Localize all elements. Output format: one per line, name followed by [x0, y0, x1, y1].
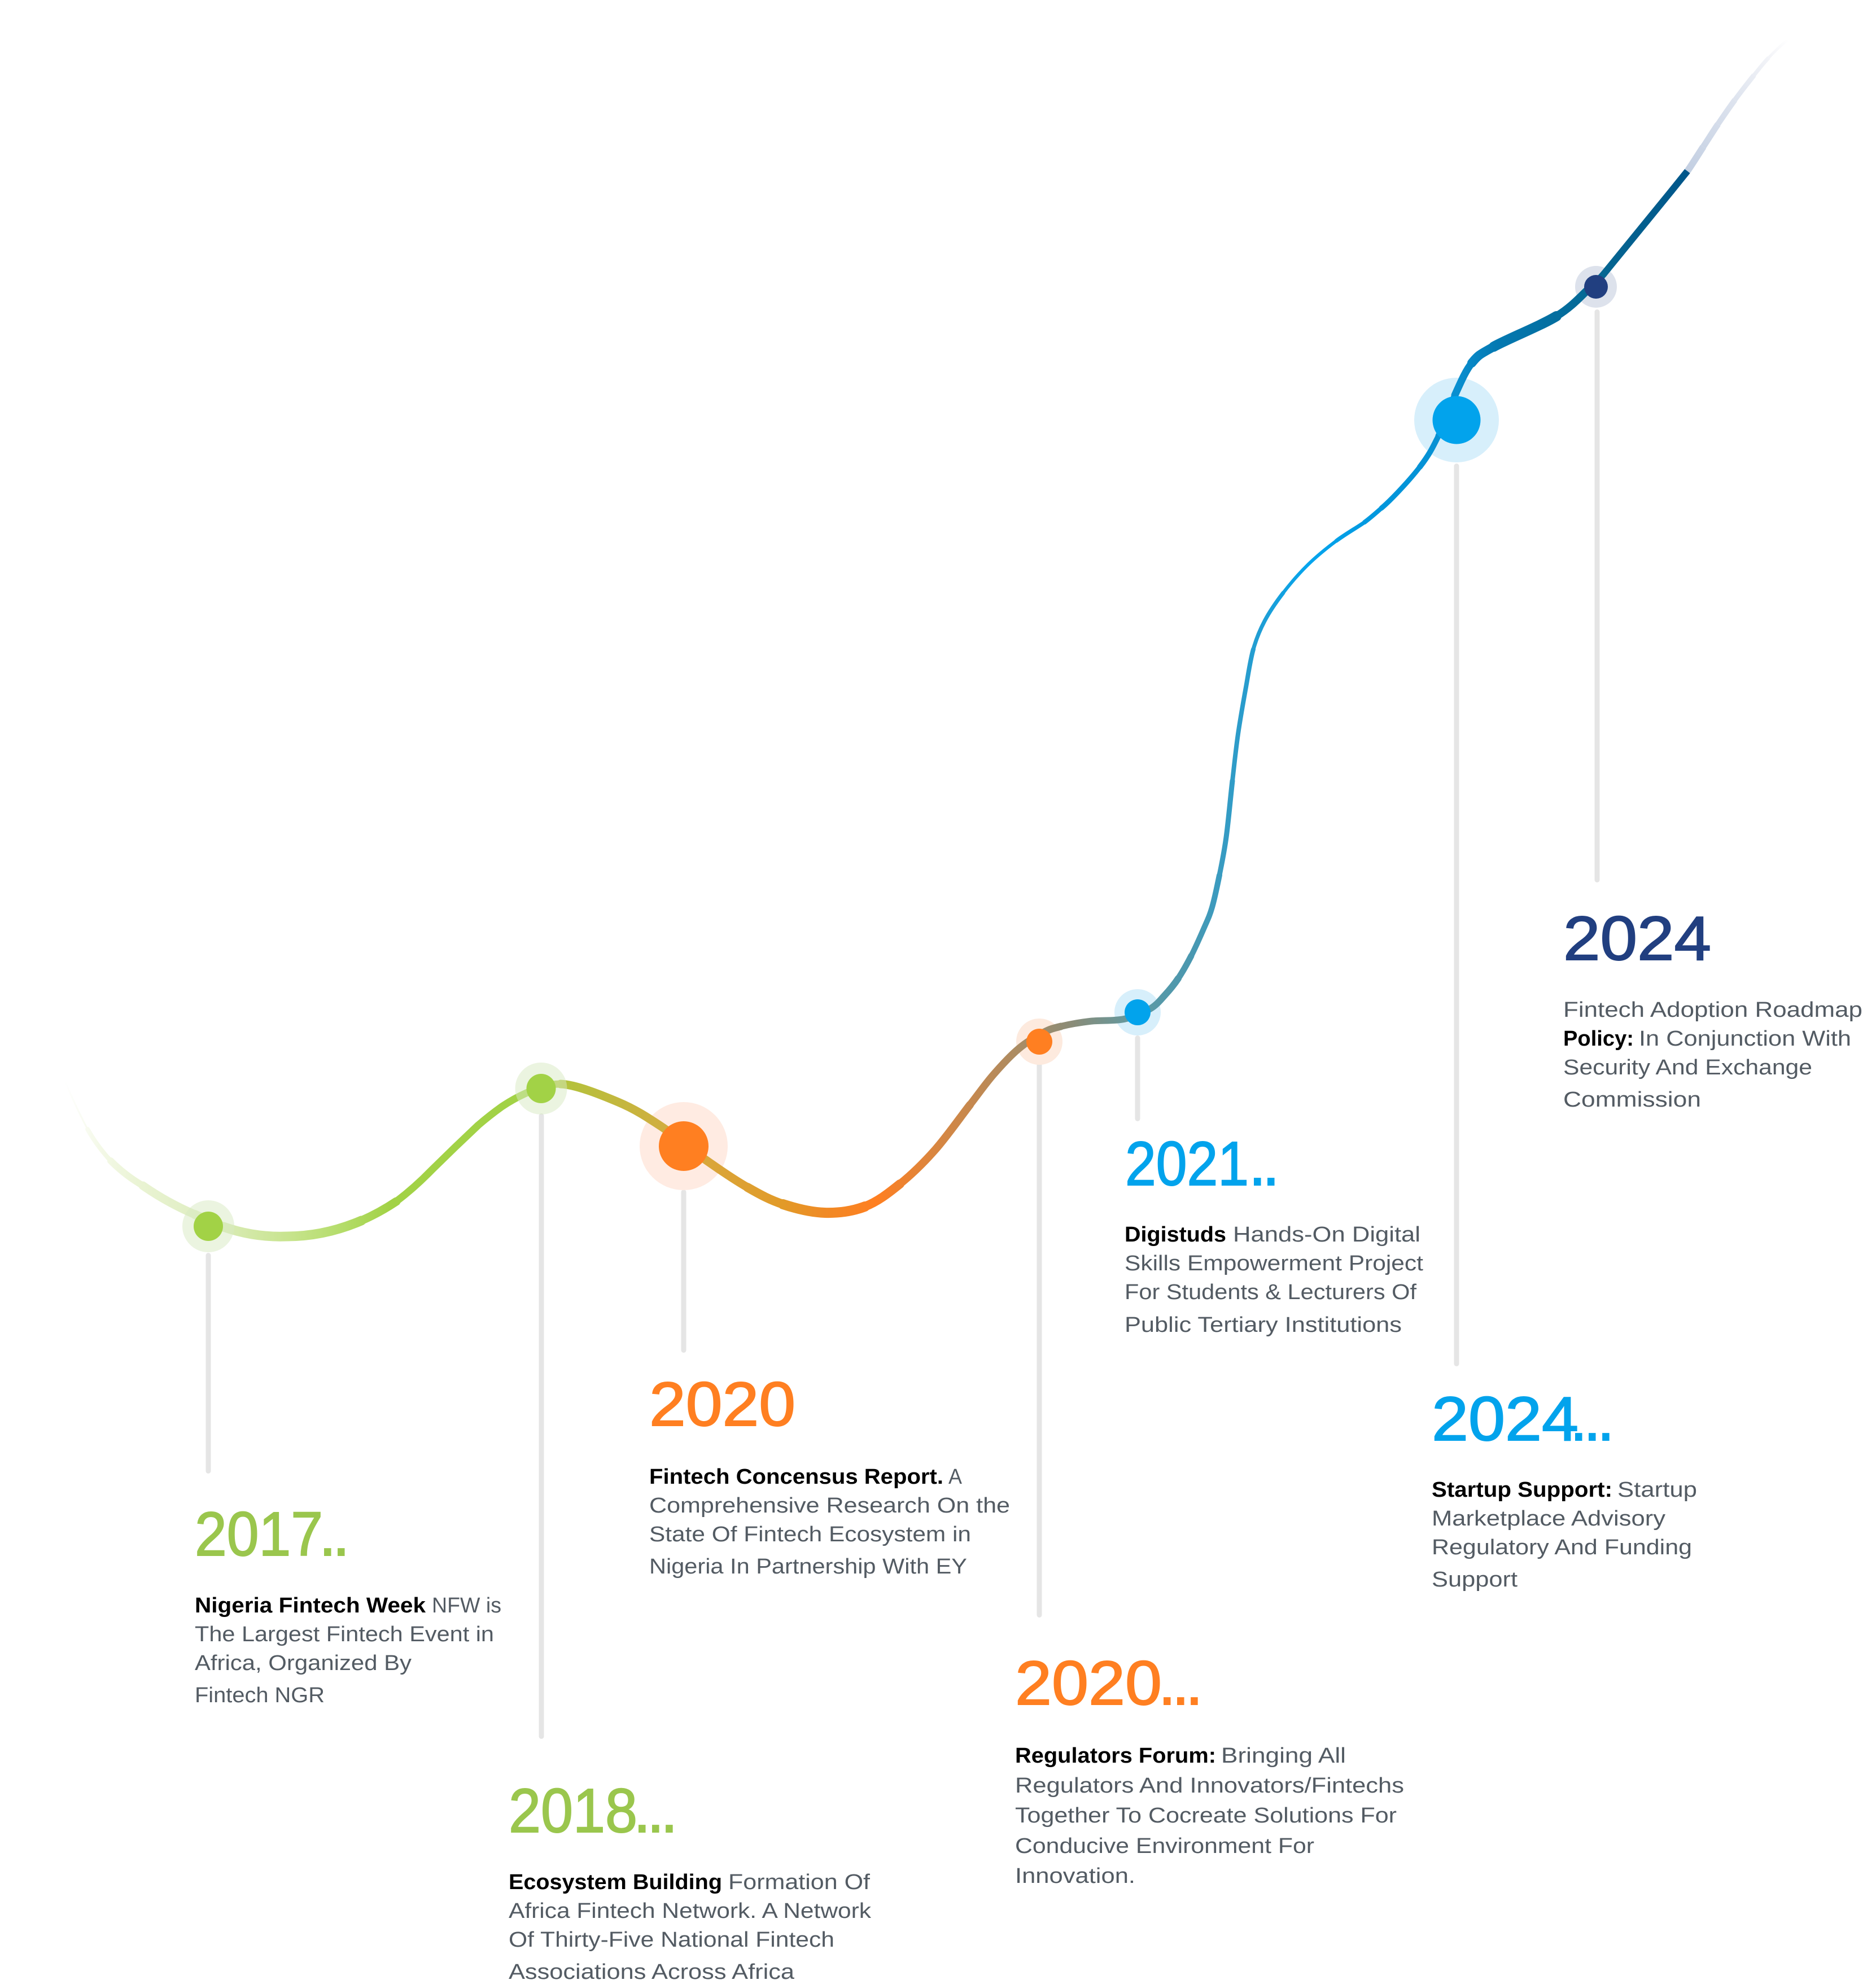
description: Hands-On Digital	[1233, 1223, 1420, 1247]
description: Bringing All	[1221, 1744, 1346, 1768]
description: Policy:	[1563, 1027, 1634, 1051]
description: Commission	[1563, 1088, 1701, 1112]
description: Startup Support:	[1432, 1478, 1612, 1502]
milestone: 2017	[195, 1500, 501, 1707]
description: Together To Cocreate Solutions For	[1015, 1804, 1397, 1828]
marker: 2018	[515, 1063, 567, 1114]
description	[1563, 998, 1862, 1112]
year: 2020	[1015, 1649, 1162, 1718]
milestone: 2021: ..	[1249, 1129, 1276, 1199]
milestone: 2018: ...	[633, 1776, 674, 1846]
description	[509, 1870, 872, 1980]
milestone: 2024 startup support	[1432, 1384, 1697, 1592]
description	[1125, 1223, 1423, 1337]
description: Nigeria Fintech Week	[195, 1594, 426, 1618]
description	[195, 1594, 501, 1707]
description: Startup	[1617, 1478, 1697, 1502]
year: 2018	[509, 1776, 637, 1846]
description: State Of Fintech Ecosystem in	[649, 1523, 971, 1546]
description: NFW is	[432, 1594, 501, 1618]
description: Support	[1432, 1568, 1518, 1592]
year: 2020	[649, 1370, 795, 1439]
marker: 2020	[659, 1121, 709, 1171]
description: Fintech NGR	[195, 1684, 325, 1707]
description: Digistuds	[1125, 1223, 1226, 1247]
connector line: 2021	[1135, 1035, 1140, 1121]
milestone: 2020 regulators forum: ...	[1158, 1649, 1199, 1718]
description: Ecosystem Building	[509, 1870, 722, 1894]
marker: 2021	[1125, 999, 1151, 1025]
growth curve	[65, 40, 1788, 1236]
description: Skills Empowerment Project	[1125, 1252, 1423, 1275]
year: 2017	[195, 1500, 323, 1569]
description: Regulators And Innovators/Fintechs	[1015, 1774, 1404, 1798]
description: For Students & Lecturers Of	[1125, 1280, 1416, 1304]
milestone: 2017: ..	[319, 1500, 346, 1569]
marker: 2017	[182, 1200, 234, 1252]
milestone: 2021	[1125, 1129, 1423, 1337]
connector line: 2017	[205, 1253, 211, 1474]
description	[1432, 1478, 1697, 1592]
marker: 2024 policy	[1584, 275, 1608, 299]
description: Fintech Concensus Report.	[649, 1465, 943, 1489]
description: Marketplace Advisory	[1432, 1507, 1665, 1531]
description: A	[948, 1465, 963, 1489]
connector line: 2020	[681, 1190, 686, 1353]
description: Regulators Forum:	[1015, 1744, 1216, 1768]
connector line: 2024 startup	[1454, 464, 1459, 1366]
year: 2024	[1432, 1384, 1578, 1454]
description	[649, 1465, 1010, 1579]
marker: 2024 startup	[1433, 396, 1480, 444]
description: Fintech Adoption Roadmap	[1563, 998, 1862, 1022]
description: Formation Of	[728, 1870, 870, 1894]
milestone: 2020 regulators forum	[1015, 1649, 1404, 1888]
year: 2021	[1125, 1129, 1249, 1199]
description: In Conjunction With	[1639, 1027, 1851, 1051]
connector line: 2018	[539, 1113, 544, 1739]
description: Regulatory And Funding	[1432, 1536, 1692, 1559]
marker: 2020 regulators	[1026, 1029, 1052, 1055]
description: Nigeria In Partnership With EY	[649, 1555, 967, 1579]
connector line: 2024 policy	[1594, 309, 1600, 882]
description: Security And Exchange	[1563, 1056, 1812, 1079]
connector line: 2020 regulators	[1037, 1055, 1042, 1618]
milestone: 2018	[509, 1776, 872, 1980]
description: Public Tertiary Institutions	[1125, 1313, 1402, 1337]
description: Africa Fintech Network. A Network	[509, 1899, 872, 1923]
description: Conducive Environment For	[1015, 1834, 1314, 1858]
description: Africa, Organized By	[195, 1651, 412, 1675]
description	[1015, 1744, 1404, 1888]
description: Innovation.	[1015, 1864, 1135, 1888]
milestone: 2020 consensus report	[649, 1370, 1010, 1579]
description: Comprehensive Research On the	[649, 1494, 1010, 1518]
year: 2024	[1563, 904, 1711, 973]
halos behind the curve	[640, 266, 1617, 1190]
description: Of Thirty-Five National Fintech	[509, 1928, 834, 1952]
milestone: 2024 startup support: ...	[1570, 1384, 1611, 1454]
milestone: 2024 adoption roadmap	[1563, 904, 1862, 1112]
description: The Largest Fintech Event in	[195, 1623, 494, 1646]
